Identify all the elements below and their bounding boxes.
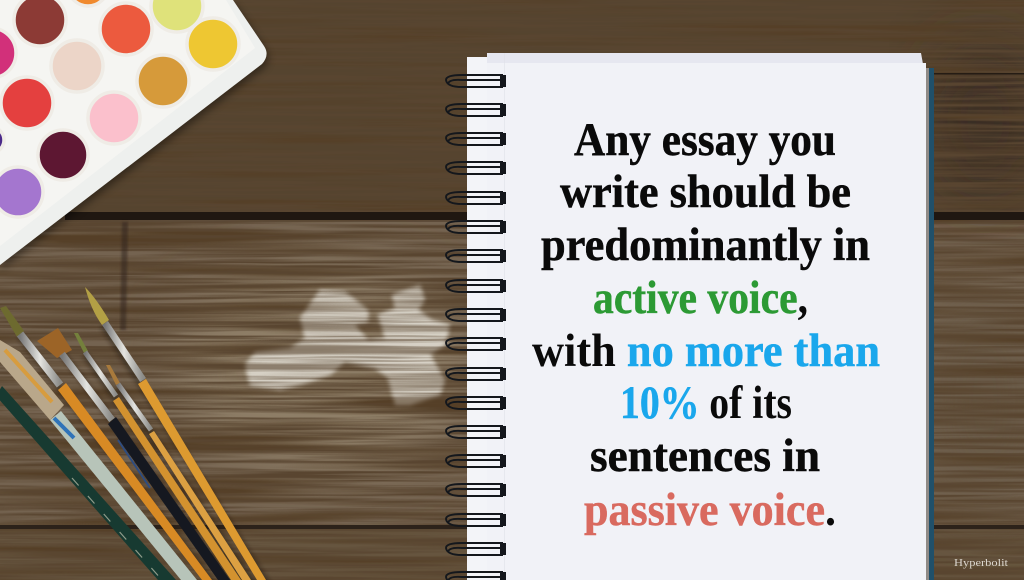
main statement text: active voice,: [593, 272, 808, 324]
main statement text: Any essay you: [574, 114, 836, 166]
brush shadows: [20, 326, 268, 580]
white paint stain highlight: [245, 285, 450, 405]
top sheet strip: [487, 53, 923, 64]
spiral rings: [446, 75, 506, 580]
main statement text: passive voice.: [584, 484, 836, 536]
paint brushes: [0, 287, 268, 580]
main statement text: sentences in: [590, 430, 820, 482]
paint pans: [0, 0, 239, 217]
white paint stain under grain: [245, 285, 450, 405]
spiral notebook: [446, 53, 934, 580]
main statement text: with no more than: [532, 325, 880, 377]
brush: pale grey handle: [0, 340, 197, 580]
main statement text: predominantly in: [541, 219, 870, 271]
brush: orange handle: [0, 306, 212, 580]
brush: thin orange handle: [74, 333, 241, 580]
watercolor palette: [0, 0, 269, 269]
watermark: Hyperbolit: Hyperbolit: [954, 558, 1008, 569]
main statement text: 10% of its: [620, 377, 792, 429]
back sheet: [467, 57, 487, 580]
main statement text: [532, 114, 880, 536]
main statement text: write should be: [560, 166, 851, 218]
brush: flat with black handle: [37, 328, 230, 580]
notebook back cover: [926, 68, 934, 580]
brush: small orange handle: [106, 365, 251, 580]
brush: long orange handle, rightmost: [85, 287, 266, 580]
page: [487, 63, 926, 580]
brush: dark green pencil-like handle: [0, 386, 176, 580]
